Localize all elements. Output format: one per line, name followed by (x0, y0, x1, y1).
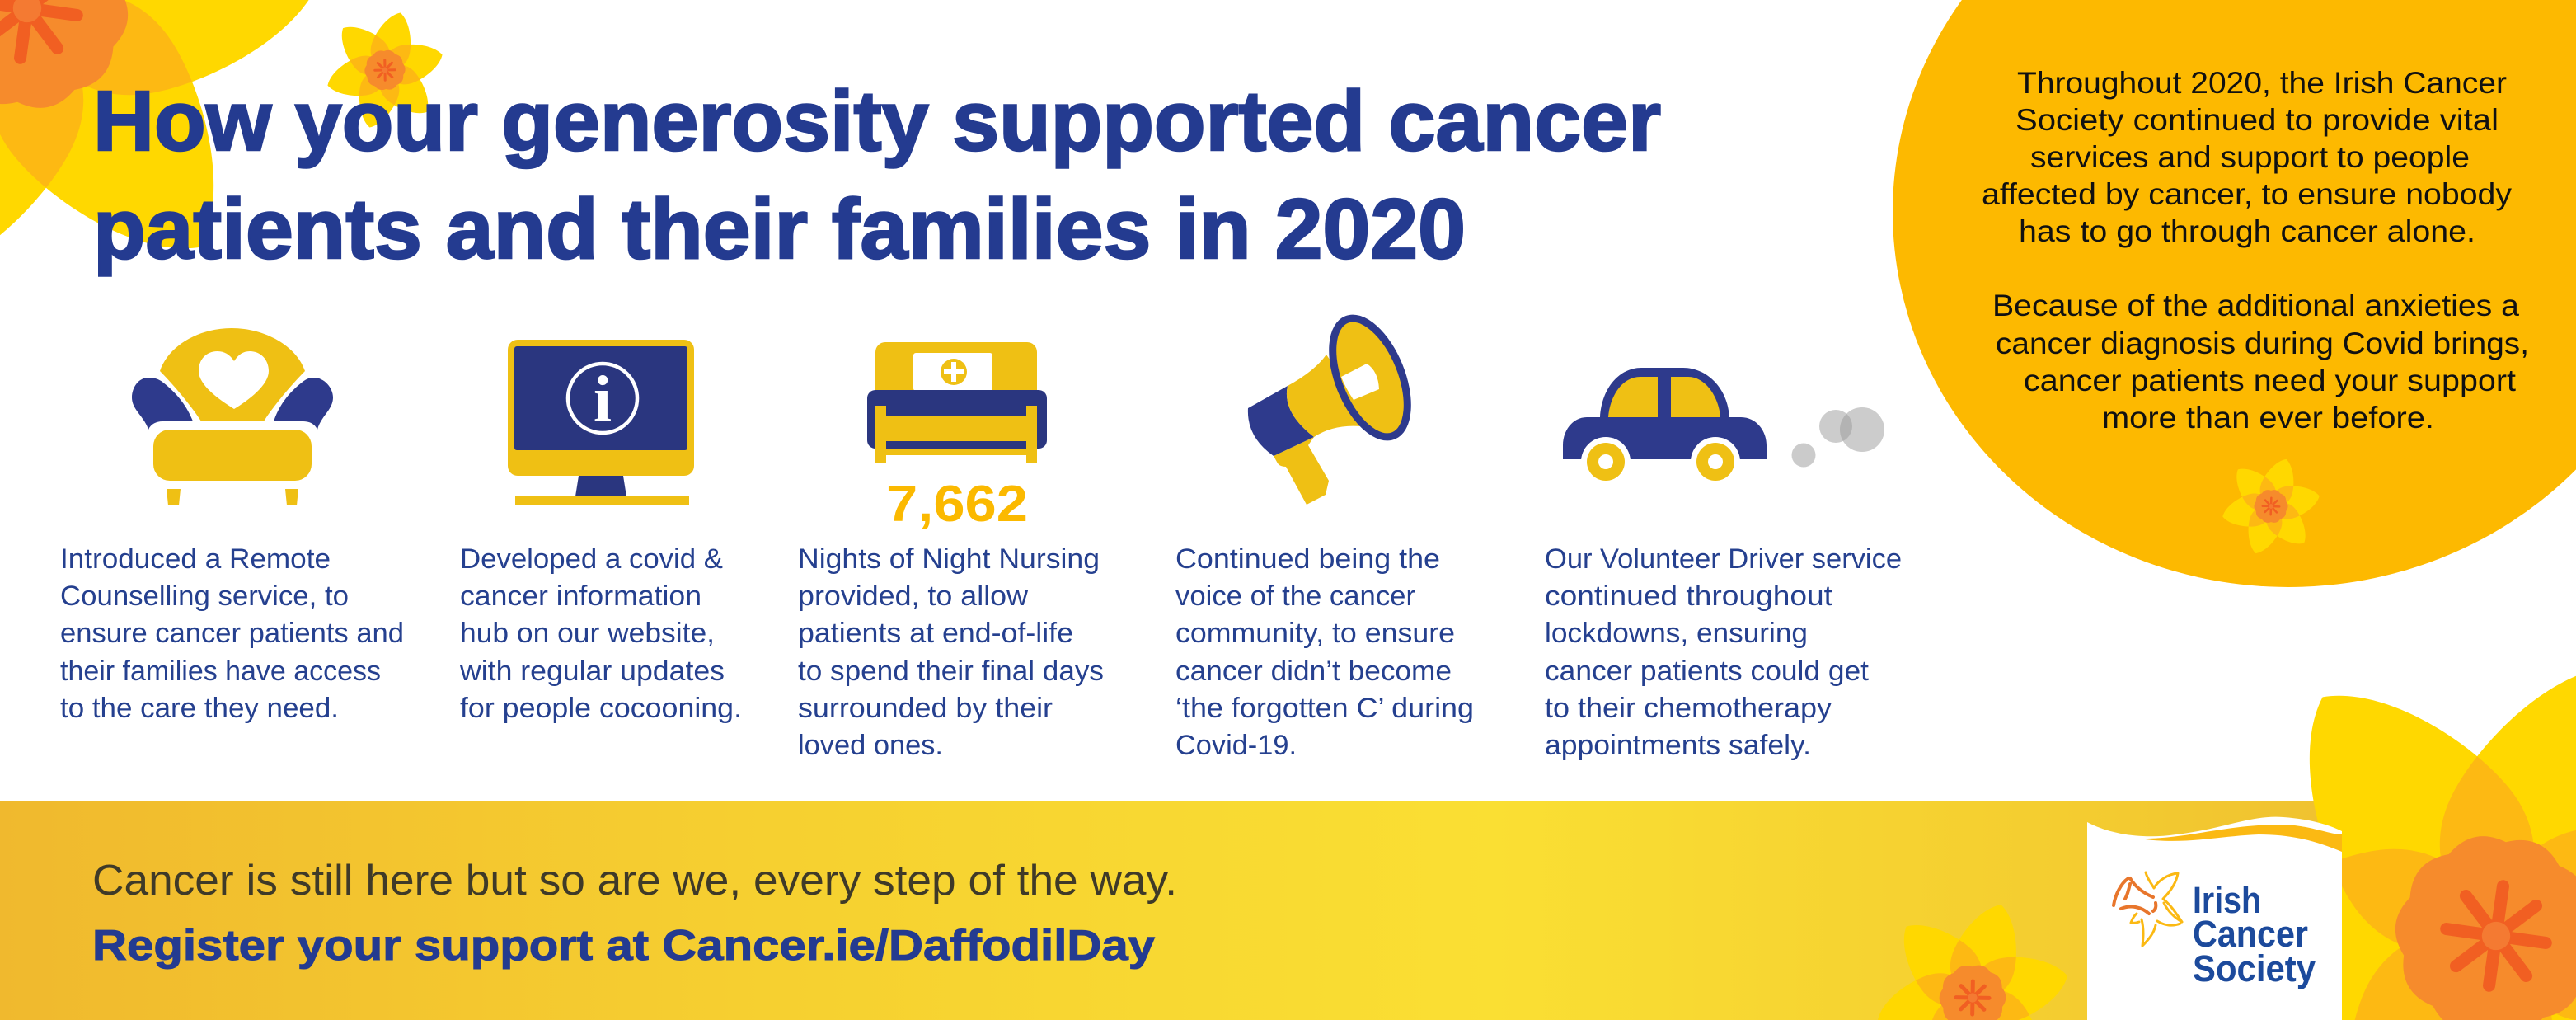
icon: information monitor: i (594, 364, 612, 436)
flower: daffodil in circle (2208, 444, 2334, 569)
panel: intro circle (1893, 0, 2576, 587)
text: information hub (459, 543, 742, 724)
text: volunteer driver: lockdowns, ensuring (1545, 618, 1808, 649)
text: voice of the community: Continued being the (1175, 543, 1440, 575)
text: voice of the community: cancer didn’t become (1175, 656, 1452, 687)
text: circle message: Throughout 2020, the Irish Cancer (2017, 66, 2507, 100)
text: night nursing: surrounded by their (798, 693, 1053, 724)
text: information hub: for people cocooning. (460, 693, 742, 724)
text: night nursing: loved ones. (798, 730, 943, 761)
icon: car with exhaust smoke (1558, 368, 1884, 493)
icon: megaphone (1248, 308, 1423, 505)
text: voice of the community: community, to ensure (1175, 618, 1455, 649)
text: circle message: has to go through cancer alone. (2019, 214, 2475, 248)
text: circle message: cancer patients need your support (2024, 364, 2517, 397)
text: night nursing: Nights of Night Nursing (798, 543, 1100, 575)
text: night nursing: provided, to allow (798, 581, 1028, 612)
text: volunteer driver: continued throughout (1545, 581, 1833, 612)
logo wordmark: Irish (2193, 879, 2261, 921)
text: night nursing (798, 543, 1104, 761)
logo mark: daffodil (2114, 872, 2182, 946)
text: remote counselling: ensure cancer patients and (60, 618, 404, 649)
text: volunteer driver: to their chemotherapy (1545, 693, 1832, 724)
text: circle message (1982, 66, 2529, 435)
text: remote counselling: Introduced a Remote (60, 543, 331, 575)
text: information hub: Developed a covid & (460, 543, 723, 575)
logo wordmark (2193, 879, 2316, 989)
text: circle message: affected by cancer, to ensure nobody (1982, 177, 2513, 211)
logo wordmark: Society (2193, 947, 2316, 989)
stat: 7,662: 7,662 (886, 476, 1028, 533)
text: remote counselling: Counselling service, to (60, 581, 349, 612)
flower: bottom-right daffodil (2310, 676, 2576, 1020)
icon: nursing bed (867, 342, 1047, 463)
text: band tagline: Cancer is still here but so are we, every step of the way. (92, 857, 1177, 905)
text: voice of the community (1175, 543, 1474, 761)
text: volunteer driver (1545, 543, 1902, 761)
text: information hub: with regular updates (459, 656, 725, 687)
text: circle message: Because of the additional anxieties a (1992, 289, 2519, 322)
text: night nursing: patients at end-of-life (798, 618, 1073, 649)
logo: Irish Cancer Society (2087, 817, 2342, 1020)
text: volunteer driver: cancer patients could get (1545, 656, 1870, 687)
text: remote counselling: to the care they need. (60, 693, 339, 724)
text: information hub: hub on our website, (460, 618, 715, 649)
text: night nursing: to spend their final days (798, 656, 1104, 687)
text: volunteer driver: Our Volunteer Driver service (1545, 543, 1902, 575)
flower: top-left daffodil (0, 0, 308, 249)
text: remote counselling: their families have access (60, 656, 381, 687)
text: voice of the community: voice of the cancer (1175, 581, 1415, 612)
logo wordmark: Cancer (2193, 913, 2308, 955)
flower: small daffodil by title (311, 0, 459, 143)
text: circle message: more than ever before. (2102, 401, 2434, 435)
flower: daffodil in band (1878, 905, 2067, 1020)
text: volunteer driver: appointments safely. (1545, 730, 1811, 761)
text: voice of the community: ‘the forgotten C’ during (1175, 693, 1474, 724)
text: circle message: cancer diagnosis during Covid brings, (1996, 327, 2529, 360)
icon: armchair with heart (132, 328, 333, 505)
text: circle message: Society continued to provide vital (2015, 103, 2499, 137)
title (93, 73, 1661, 276)
text: circle message: services and support to people (2030, 140, 2470, 174)
panel: bottom band (0, 801, 2576, 1020)
text: information hub: cancer information (460, 581, 701, 612)
text: call to action: Register your support at Cancer.ie/DaffodilDay (92, 922, 1155, 970)
text: remote counselling (60, 543, 404, 724)
icon: information monitor (508, 340, 694, 505)
text: voice of the community: Covid-19. (1175, 730, 1297, 761)
title: patients and their families in 2020 (93, 181, 1466, 276)
title: How your generosity supported cancer (93, 73, 1661, 168)
